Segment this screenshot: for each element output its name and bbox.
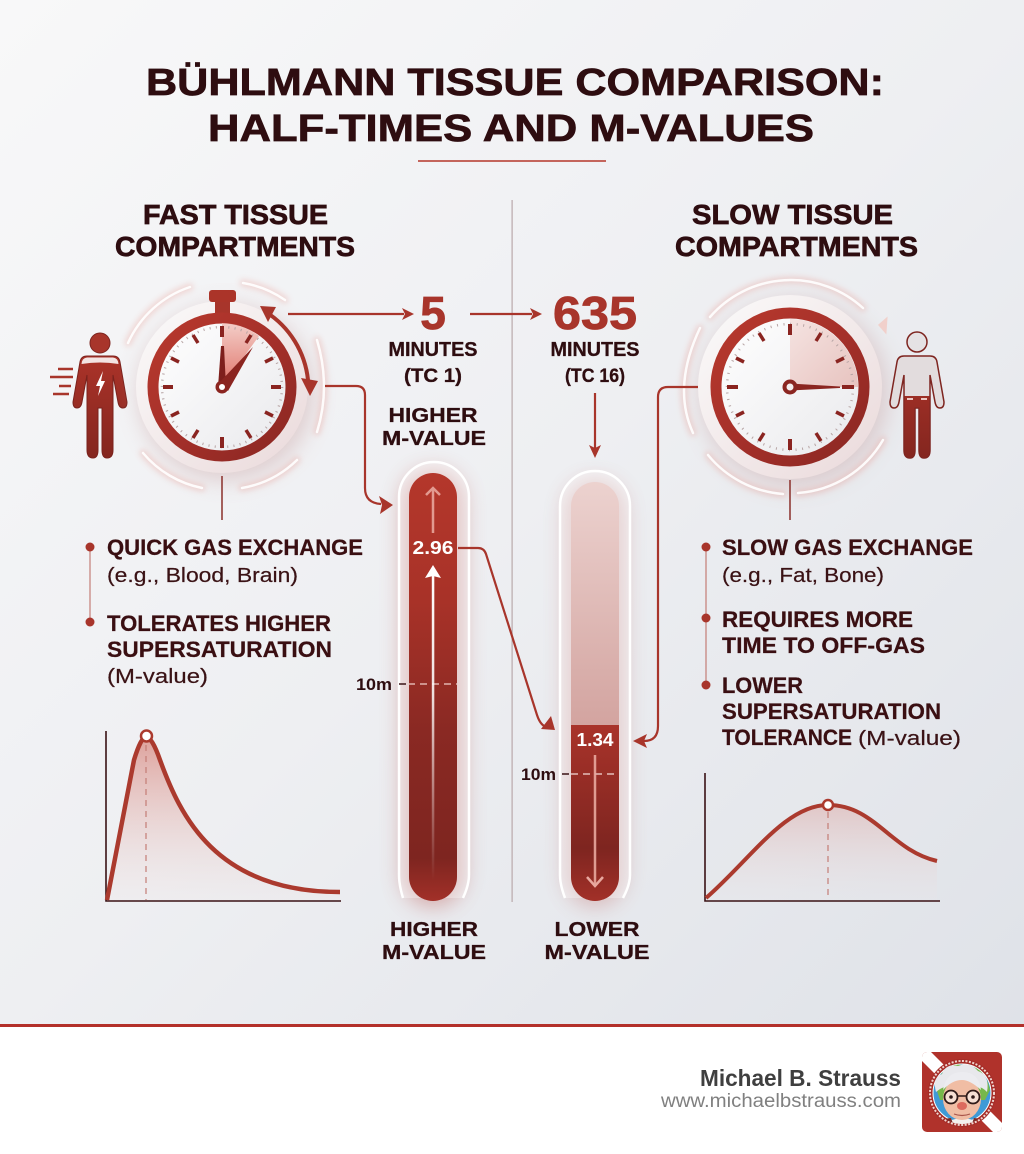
label: higher m-value top (382, 405, 486, 450)
minor ticks (162, 327, 282, 447)
gauge: slow m-value bar (560, 471, 630, 906)
icon: fast person (50, 333, 127, 458)
halo disc (698, 295, 882, 479)
list: fast tissue traits: TOLERATES HIGHER (107, 611, 331, 636)
value: 1.34 (576, 730, 614, 750)
glow arcs (684, 280, 883, 494)
stat: 635 minutes: 635 (553, 287, 637, 339)
wedge (222, 323, 259, 387)
stat: 5 minutes: MINUTES (388, 339, 478, 361)
rim (716, 313, 864, 461)
label: higher m-value bottom (382, 919, 486, 964)
stat: 5 minutes: (TC 1) (404, 366, 462, 387)
bar fill (409, 473, 457, 901)
faint top arrow (426, 488, 440, 533)
list: slow tissue traits: REQUIRES MORE (722, 607, 913, 632)
heading: fast tissue: FAST TISSUE (143, 199, 328, 230)
heading: fast tissue (115, 199, 355, 262)
list: slow tissue traits: (e.g., Fat, Bone) (722, 565, 884, 587)
halo disc (136, 301, 308, 473)
label: 10m slow: 10m (521, 765, 556, 784)
chart: slow tissue curve (705, 773, 940, 901)
arrow: fast clock to bar (325, 386, 393, 514)
center divider (512, 200, 513, 902)
list: slow tissue traits: LOWER (722, 673, 803, 698)
website: www.michaelbstrauss.com (660, 1091, 901, 1112)
curve (107, 737, 340, 900)
peak (141, 730, 152, 742)
list: slow tissue traits (702, 535, 973, 750)
arrow: 635 down to bar (589, 393, 601, 458)
list: fast tissue traits: (e.g., Blood, Brain) (107, 565, 298, 587)
faint arrow (877, 316, 888, 334)
heading: slow tissue: COMPARTMENTS (675, 231, 918, 262)
label: lower m-value bottom (544, 919, 650, 964)
heading: slow tissue: SLOW TISSUE (692, 199, 893, 230)
list: fast tissue traits: SUPERSATURATION (107, 637, 332, 662)
list: slow tissue traits: SLOW GAS EXCHANGE (722, 535, 973, 560)
area (706, 805, 937, 901)
title: HALF-TIMES AND M-VALUES (208, 108, 814, 150)
list: slow tissue traits: SUPERSATURATION (722, 699, 941, 724)
arrow: slow clock to bar (633, 387, 698, 748)
title: BÜHLMANN TISSUE COMPARISON: (146, 61, 884, 104)
heading: fast tissue: COMPARTMENTS (115, 231, 355, 262)
curve (706, 805, 937, 898)
arrow: 5 to 635 (470, 308, 542, 320)
rim (153, 318, 291, 456)
double arrow (260, 306, 318, 396)
area (107, 737, 340, 901)
stat: 635 minutes: (TC 16) (565, 366, 625, 387)
bar dark part (571, 725, 619, 901)
label: higher m-value top: M-VALUE (382, 428, 486, 450)
label: higher m-value bottom: M-VALUE (382, 942, 486, 964)
major ticks (163, 326, 281, 448)
chart: fast tissue curve (106, 730, 341, 901)
hands (218, 346, 226, 387)
minor ticks (727, 324, 853, 450)
connector: fast clock to bullets (221, 476, 223, 520)
stat: 635 minutes (550, 287, 640, 387)
list: slow tissue traits: (M-value) (858, 728, 961, 750)
icon: slow stopwatch (684, 280, 888, 494)
peak (823, 800, 833, 810)
wedge (790, 319, 858, 387)
hand (790, 384, 840, 390)
bar light part (571, 482, 619, 725)
bar outline (399, 462, 469, 898)
icon: slow person (890, 332, 944, 458)
title (146, 61, 884, 162)
value: 2.96 (412, 538, 454, 558)
bar outline (560, 471, 630, 898)
icon: fast stopwatch (128, 283, 324, 488)
logo (922, 1052, 1002, 1132)
gauge: fast m-value bar (399, 462, 469, 906)
label: lower m-value bottom: M-VALUE (544, 942, 650, 964)
label: higher m-value top: HIGHER (388, 405, 478, 427)
label: 10m fast (356, 675, 406, 694)
stat: 635 minutes: MINUTES (550, 339, 640, 361)
list: fast tissue traits (86, 535, 363, 688)
arrow down (587, 755, 603, 886)
arrow: 2.96 to 1.34 (458, 548, 555, 730)
dashed marker (571, 773, 619, 775)
dashed marker (408, 683, 457, 685)
list: fast tissue traits: (M-value) (107, 666, 208, 688)
list: fast tissue traits: QUICK GAS EXCHANGE (107, 535, 363, 560)
footer (0, 1024, 1024, 1132)
axes (705, 773, 940, 901)
label: 10m fast: 10m (356, 675, 392, 694)
author name: Michael B. Strauss (700, 1065, 901, 1091)
crown (209, 290, 236, 315)
list: slow tissue traits: TIME TO OFF-GAS (722, 633, 925, 658)
stat: 5 minutes (388, 287, 478, 387)
stat: 5 minutes: 5 (420, 287, 446, 339)
label: higher m-value bottom: HIGHER (390, 919, 479, 941)
glow arcs (128, 283, 324, 488)
list: slow tissue traits: TOLERANCE (722, 725, 852, 750)
arrow: fast clock to 5 (288, 308, 414, 320)
white arrow (425, 565, 441, 880)
major ticks (727, 324, 854, 450)
heading: slow tissue (675, 199, 918, 262)
label: lower m-value bottom: LOWER (554, 919, 640, 941)
connector: slow clock to bullets (789, 480, 791, 520)
axes (106, 731, 341, 901)
